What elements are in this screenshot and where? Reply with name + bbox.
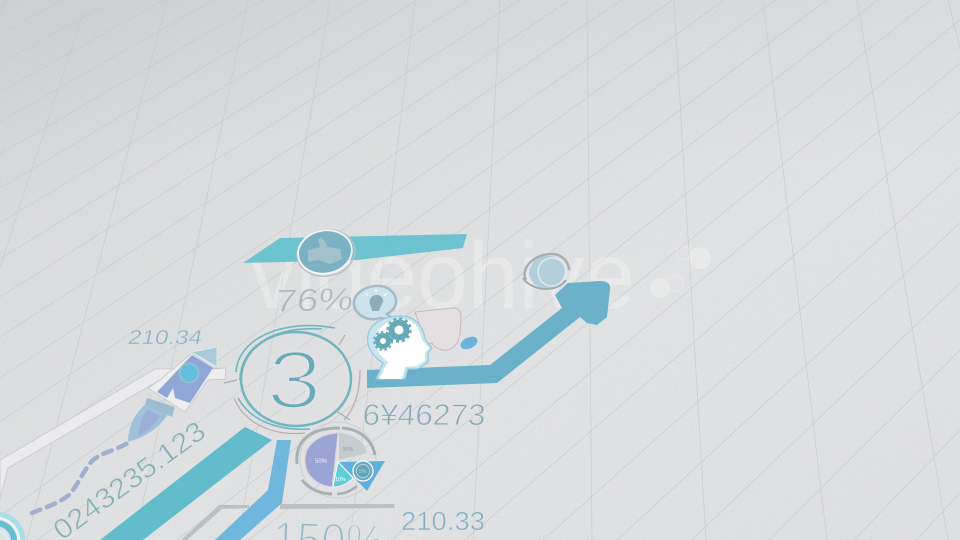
icon: blue pill: [459, 334, 479, 352]
pie chart: [297, 422, 385, 498]
label: 210.33: 210.33: [401, 506, 485, 536]
connector strip behind rocket: [0, 368, 226, 498]
grey rules: [181, 504, 395, 540]
pie chart: 10%: [335, 477, 346, 483]
pie chart: 35%: [342, 447, 353, 453]
number: 6¥46273: 6¥46273: [362, 399, 487, 432]
pie chart: 5%: [359, 469, 367, 475]
icon: glass globe with arcs: [523, 252, 569, 292]
icon: pink heart shape: [415, 308, 461, 350]
label: 210.34: 210.34: [126, 327, 204, 349]
teal diagonal bar: [100, 427, 272, 540]
blue stepped path: [215, 440, 291, 540]
icon: gears: [374, 318, 410, 350]
dial with number 3: 3: [265, 335, 324, 426]
icon: head with gears: [368, 316, 432, 379]
flight trail: [32, 443, 128, 513]
icon: thumbs up: [293, 225, 359, 281]
icon: target circle at corner: [0, 514, 23, 540]
icon: lightbulb speech bubble: [354, 286, 396, 320]
arrow: rising teal arrow: [367, 281, 610, 388]
percentage: 76%: 76%: [273, 281, 355, 319]
dial with number 3: [224, 326, 360, 433]
watermark: videohive: videohive: [250, 223, 635, 329]
teal banner with thumbs-up badge: [243, 225, 467, 281]
pie chart: 50%: [315, 459, 328, 465]
icon: rocket: [32, 347, 226, 513]
